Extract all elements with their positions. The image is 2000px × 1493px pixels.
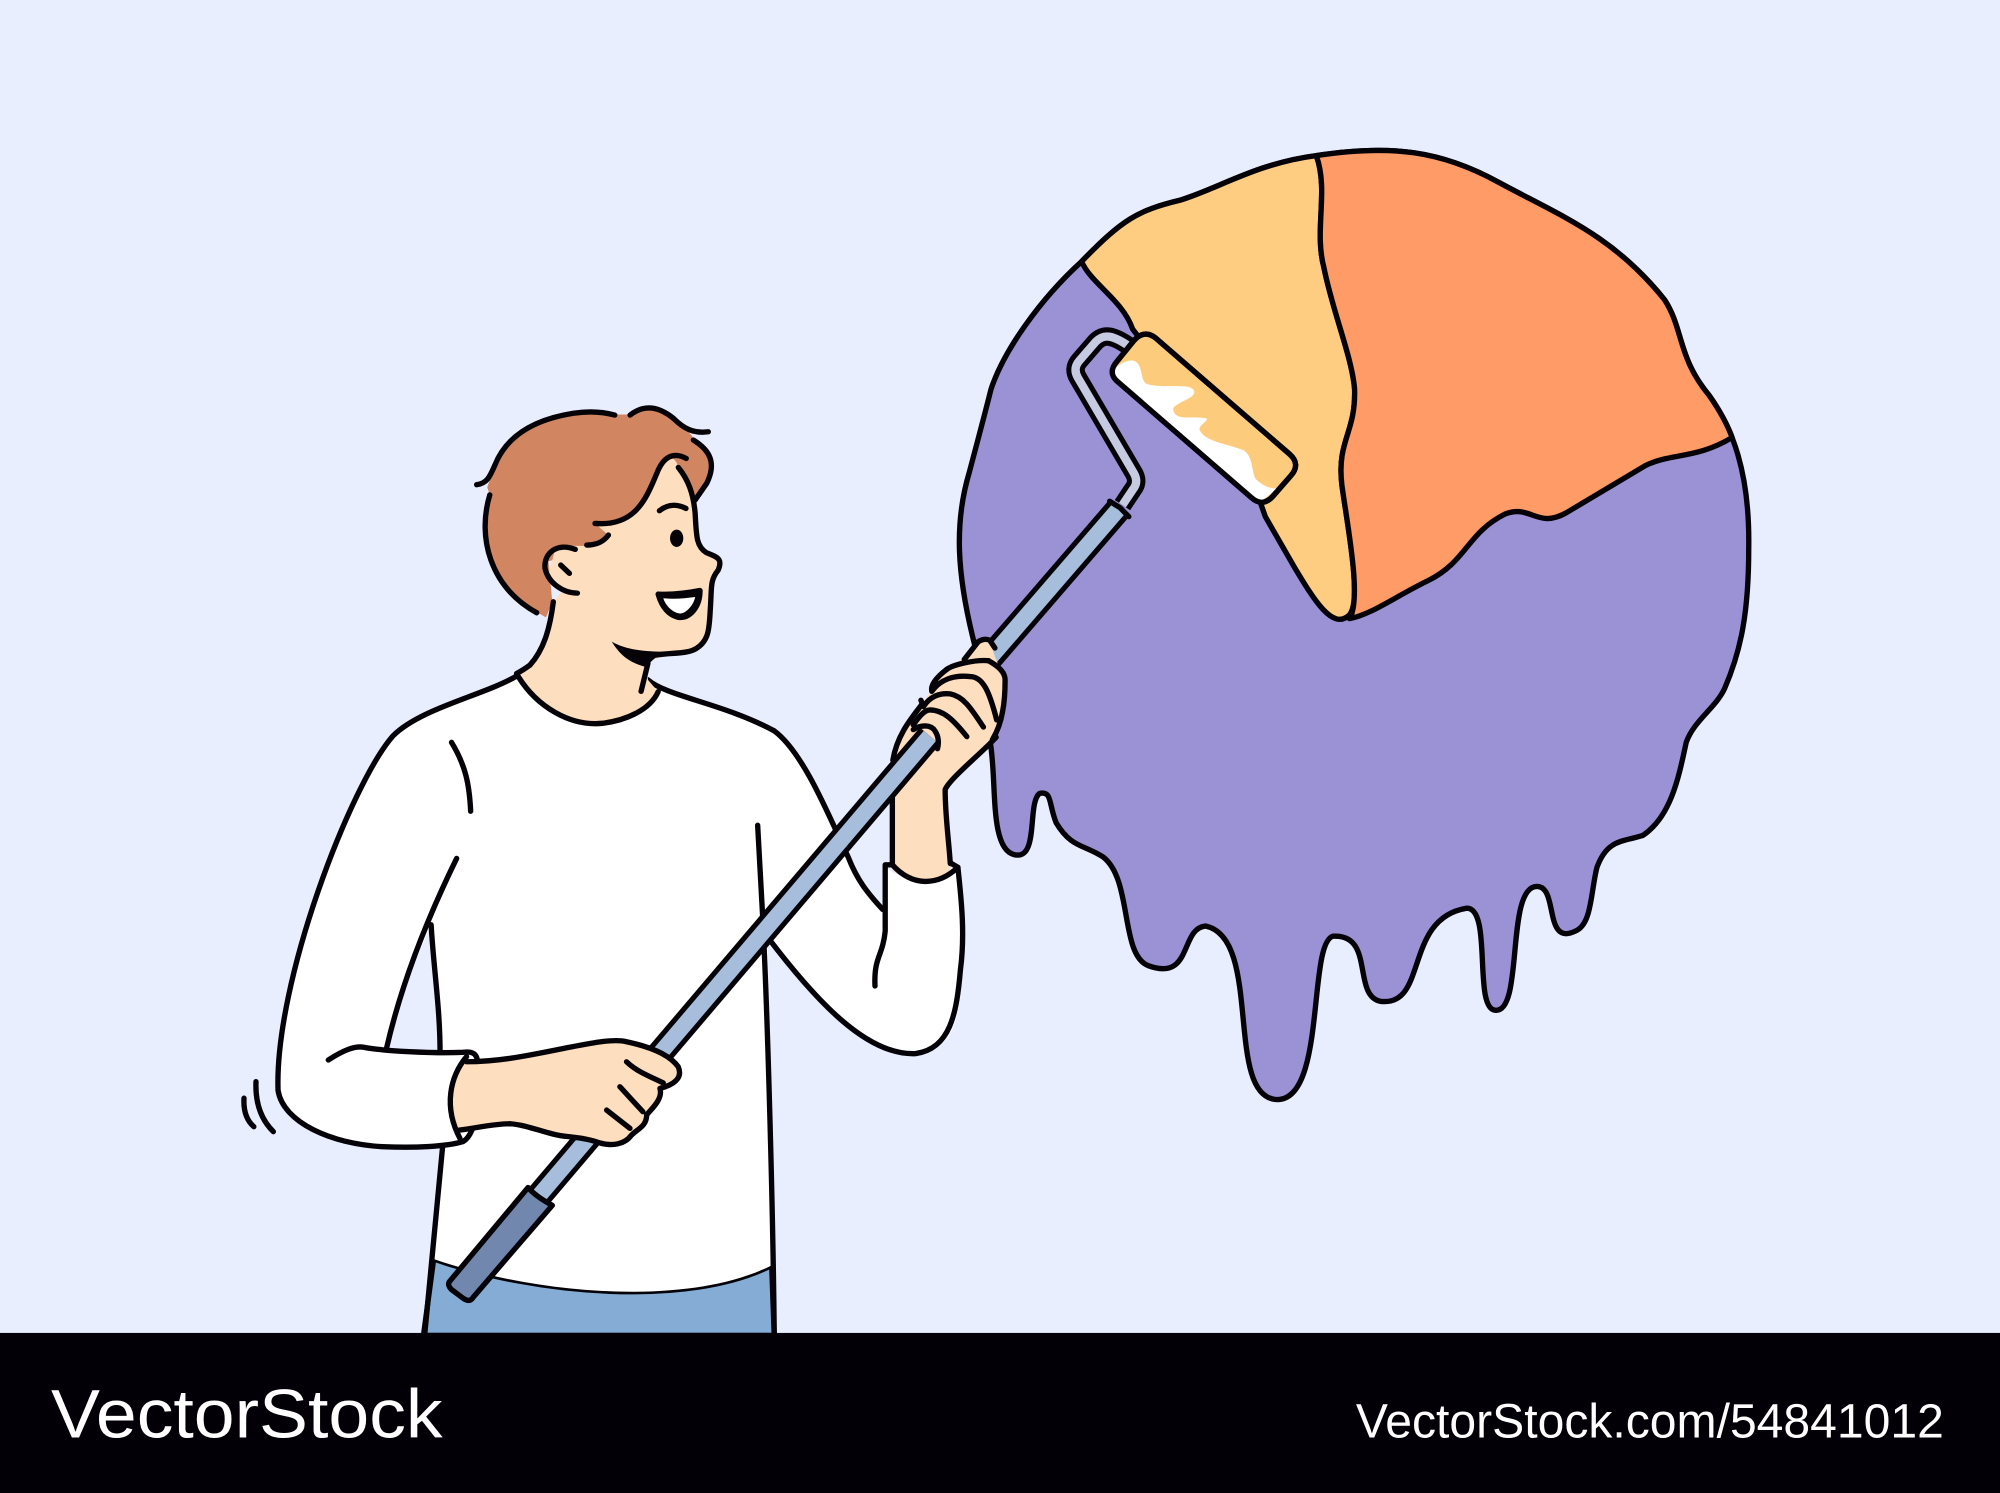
hair fill [485, 408, 711, 617]
upper hand gripping pole [892, 639, 1005, 881]
lower hand on pole [450, 1041, 680, 1145]
neck lines [641, 663, 648, 691]
shirt outlines [278, 676, 517, 1147]
image url text: VectorStock.com/54841012 [1356, 1396, 1944, 1449]
pole dark grip [449, 1188, 552, 1300]
pie chart paint blob [959, 150, 1749, 1100]
white unpainted area on roller [1114, 360, 1277, 501]
eyebrow [659, 505, 686, 511]
man: jeans [423, 1259, 774, 1335]
purple slice with drips [959, 150, 1749, 1100]
chin shadow [612, 642, 667, 667]
roller arm [1076, 337, 1136, 505]
mouth [658, 591, 700, 617]
ear [545, 547, 577, 593]
man: white shirt [278, 676, 963, 1334]
collar [518, 677, 658, 724]
pole lower section [540, 726, 938, 1195]
roller head [1112, 334, 1296, 502]
pole upper section [982, 501, 1129, 667]
eye [670, 530, 683, 547]
thumb tip over pole [913, 726, 938, 749]
orange slice [1316, 150, 1732, 619]
face profile [647, 467, 720, 657]
logo text: VectorStock [51, 1376, 443, 1453]
hair outlines [477, 412, 615, 485]
gap between arm and torso [386, 925, 440, 1052]
watermark band [0, 1333, 2000, 1493]
man: head [477, 408, 720, 724]
yellow slice [1082, 156, 1355, 619]
elbow motion lines [244, 1082, 273, 1132]
face and neck skin [518, 458, 720, 724]
paint roller [1076, 334, 1296, 505]
